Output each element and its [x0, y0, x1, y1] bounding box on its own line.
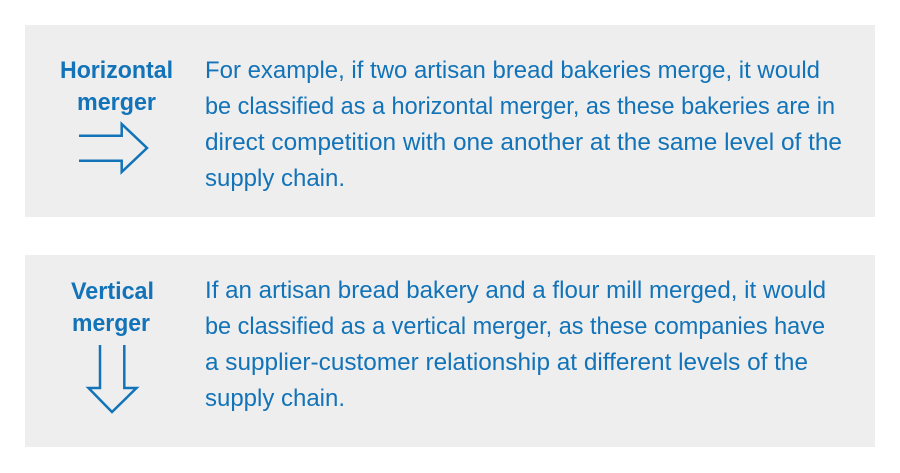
panel: vertical merger [25, 255, 875, 447]
text block: horizontal merger example: For example, if two artisan bread bakeries merge, it would [205, 57, 820, 84]
text block: vertical merger example: a supplier-customer relationship at different levels of the [205, 349, 808, 376]
text block: horizontal merger example: be classified as a horizontal merger, as these bakeries are in [205, 93, 835, 120]
text block: vertical merger example: If an artisan bread bakery and a flour mill merged, it would [205, 277, 826, 304]
heading: vertical merger [71, 278, 154, 337]
text block: vertical merger example [205, 277, 826, 412]
heading: horizontal merger: Horizontal [60, 57, 173, 84]
heading: horizontal merger: merger [77, 89, 156, 116]
panel: horizontal merger [25, 25, 875, 217]
icon: down arrow [88, 345, 136, 412]
text block: horizontal merger example [205, 57, 842, 192]
text block: vertical merger example: supply chain. [205, 385, 345, 412]
icon: right arrow [79, 124, 147, 172]
heading: horizontal merger [60, 57, 173, 116]
text block: horizontal merger example: supply chain. [205, 165, 345, 192]
heading: vertical merger: merger [72, 310, 150, 337]
heading: vertical merger: Vertical [71, 278, 154, 305]
text block: horizontal merger example: direct competition with one another at the same level of the [205, 129, 842, 156]
text block: vertical merger example: be classified as a vertical merger, as these companies have [205, 313, 825, 340]
